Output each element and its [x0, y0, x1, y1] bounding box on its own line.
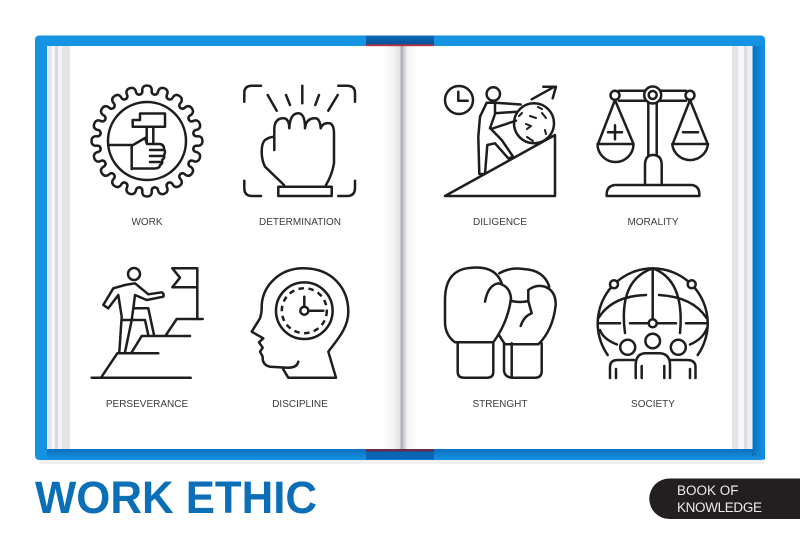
globe meridians and latitudes [598, 268, 707, 344]
climber [478, 103, 521, 174]
fist [262, 113, 334, 185]
boulder [514, 103, 554, 143]
label: diligence: DILIGENCE [473, 217, 527, 228]
top spine band [366, 36, 434, 46]
title: WORK ETHIC [35, 472, 317, 523]
left page edges [48, 46, 70, 449]
badge: book of knowledge [649, 478, 800, 519]
badge: book of knowledge: KNOWLEDGE [677, 500, 762, 515]
globe outline [598, 268, 708, 355]
stairs [92, 319, 203, 378]
corner brackets [244, 86, 355, 196]
minus sign [683, 131, 698, 134]
label: determination: DETERMINATION [259, 217, 341, 228]
slope [445, 135, 555, 196]
cover bottom edge [47, 449, 765, 460]
icon: determination fist [244, 86, 355, 196]
label: strength: STRENGHT [472, 399, 528, 410]
badge: book of knowledge: BOOK OF [677, 483, 739, 498]
icon: work gear with hammer and hand [92, 86, 203, 196]
right cuff [504, 343, 542, 378]
icon: society globe and people [598, 268, 708, 378]
icon: perseverance climber and flag [92, 268, 203, 378]
book cover [35, 36, 765, 460]
clock [445, 86, 473, 114]
base [607, 185, 699, 196]
left pan [598, 100, 634, 162]
rays [268, 86, 338, 111]
icon: diligence climber pushing boulder [445, 86, 556, 196]
cuff [278, 187, 332, 196]
right glove [499, 269, 556, 344]
right page edges [732, 46, 752, 449]
left cuff [458, 343, 493, 378]
head profile [252, 268, 348, 378]
icon: discipline head with clock [252, 268, 348, 378]
book shadow [40, 459, 764, 464]
spine fold [383, 46, 417, 449]
label: perseverance: PERSEVERANCE [106, 399, 188, 410]
label: morality: MORALITY [627, 217, 679, 228]
right pan [672, 100, 708, 160]
gear teeth [92, 86, 203, 196]
pillar [645, 103, 662, 185]
icon: morality scales [598, 86, 708, 196]
book [35, 36, 765, 464]
plus sign [608, 125, 622, 139]
equator [598, 322, 708, 325]
label: society: SOCIETY [631, 399, 675, 410]
beam [619, 91, 686, 101]
label: discipline: DISCIPLINE [272, 399, 328, 410]
left glove [445, 268, 511, 342]
people [610, 334, 696, 378]
bottom spine band [366, 449, 434, 460]
icon: strength boxing gloves [445, 268, 556, 378]
beam joints [610, 86, 694, 104]
inner ring [108, 102, 186, 180]
hand [108, 138, 165, 169]
pages [47, 46, 752, 449]
nodes [610, 280, 696, 327]
hammer [133, 114, 165, 143]
climber [128, 268, 140, 280]
label: work: WORK [131, 217, 163, 228]
flag [172, 268, 197, 319]
cover right edge [752, 46, 764, 456]
arrow [532, 87, 556, 99]
clock [276, 282, 333, 339]
